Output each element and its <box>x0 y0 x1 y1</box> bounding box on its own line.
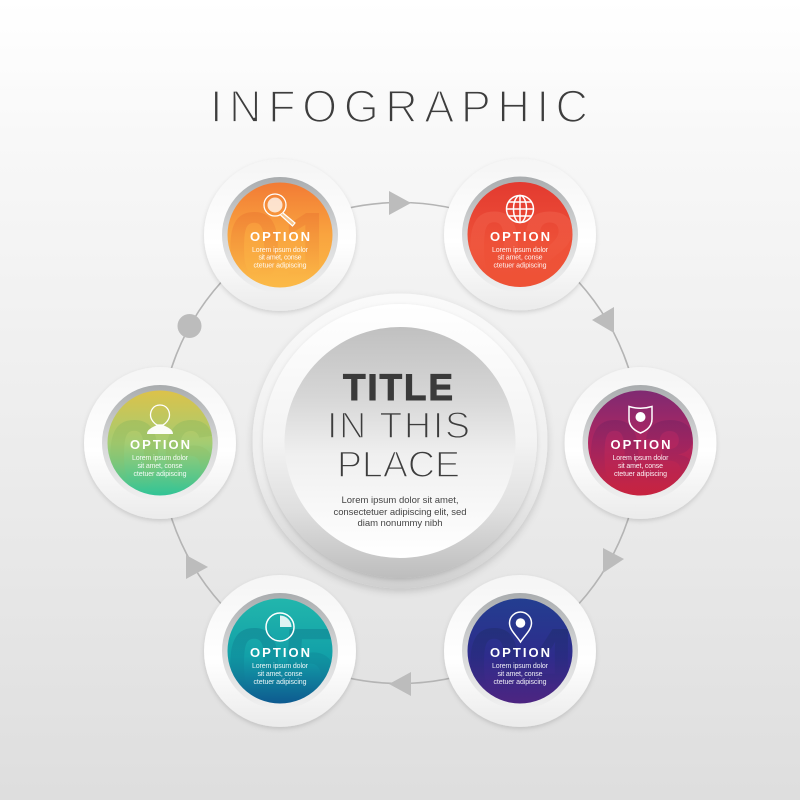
option 06: green person <box>84 367 236 519</box>
option 01 description: ctetuer adipiscing <box>254 262 307 270</box>
option 02 colour disc <box>468 182 572 287</box>
option 05 label: OPTION <box>250 645 310 660</box>
option 02: red globe <box>444 158 596 310</box>
option 05 description: Lorem ipsum dolor <box>252 663 309 670</box>
hub title: TITLE: TITLE <box>343 367 453 408</box>
option 05 description: ctetuer adipiscing <box>254 679 307 686</box>
option 01 background numeral: 01 <box>226 192 338 304</box>
option 03 label: OPTION <box>610 437 670 452</box>
option 01 label: OPTION <box>250 229 310 244</box>
option 03 description: ctetuer adipiscing <box>614 471 667 478</box>
hub outer plate <box>252 294 548 588</box>
option 06 description: Lorem ipsum dolor <box>132 455 189 462</box>
cycle connector ring <box>160 202 640 684</box>
option 03 colour disc <box>588 390 693 496</box>
option 04 white frame <box>444 575 596 727</box>
option 05 description <box>252 663 309 686</box>
option 01: orange search <box>204 159 356 311</box>
option 03 description <box>612 455 669 478</box>
option 06 grey inset ring <box>102 385 218 501</box>
option 03: magenta shield <box>564 367 716 519</box>
option 02 description <box>492 247 549 270</box>
option 01 description <box>252 247 309 270</box>
hub description: Lorem ipsum dolor sit amet, <box>342 495 458 506</box>
option 04 grey inset ring <box>462 593 578 709</box>
arrow: lower right <box>603 548 624 573</box>
central hub <box>252 294 548 588</box>
hub description: diam nonummy nibh <box>358 518 442 529</box>
arrow: upper right <box>592 307 614 333</box>
option 01 colour disc <box>228 182 332 288</box>
option 02 label: OPTION <box>490 229 550 244</box>
option 05: teal pie chart <box>204 575 356 727</box>
hub title: PLACE: PLACE <box>337 443 460 485</box>
option 01 description: Lorem ipsum dolor <box>252 247 309 254</box>
option 01 description: sit amet, conse <box>258 254 302 262</box>
option 01 white frame <box>204 159 356 311</box>
option 05 background numeral: 05 <box>226 608 338 720</box>
option 06 white frame <box>84 367 236 519</box>
hub description: consectetuer adipiscing elit, sed <box>334 507 466 518</box>
option 05 colour disc <box>228 598 332 704</box>
hub raised plate <box>263 304 537 578</box>
hub description <box>334 495 466 529</box>
icon: shield <box>629 406 652 433</box>
icon: pie chart <box>266 613 294 641</box>
option 01 grey inset ring <box>222 177 338 293</box>
option 02 description: ctetuer adipiscing <box>494 262 547 270</box>
option 02 background numeral: 02 <box>466 192 578 304</box>
option 06 background numeral: 06 <box>106 400 218 512</box>
icon: person <box>147 405 173 434</box>
option 04 background numeral: 04 <box>466 608 578 720</box>
option 06 description <box>132 455 189 478</box>
hub inner disc <box>284 327 516 558</box>
option 03 grey inset ring <box>582 385 698 501</box>
option 02 white frame <box>444 158 596 310</box>
option 04: indigo location pin <box>444 575 596 727</box>
option 03 background numeral: 03 <box>587 400 698 512</box>
option 04 colour disc <box>468 598 572 704</box>
option 02 description: sit amet, conse <box>498 254 543 262</box>
arrow: top <box>389 191 411 215</box>
option 03 description: sit amet, conse <box>618 463 663 470</box>
title: INFOGRAPHIC <box>210 81 588 132</box>
arrow: bottom <box>389 672 411 696</box>
icon: magnifier <box>264 194 295 226</box>
option 06 colour disc <box>108 390 212 496</box>
option 02 grey inset ring <box>462 176 578 292</box>
option 04 description <box>492 663 549 686</box>
cycle start dot <box>178 314 202 338</box>
option 06 description: ctetuer adipiscing <box>134 471 187 478</box>
option 06 description: sit amet, conse <box>138 463 183 470</box>
option 05 white frame <box>204 575 356 727</box>
option 04 description: ctetuer adipiscing <box>494 679 547 686</box>
option 05 grey inset ring <box>222 593 338 709</box>
option 04 description: sit amet, conse <box>498 671 543 678</box>
option 05 description: sit amet, conse <box>258 671 303 678</box>
option 06 label: OPTION <box>130 437 190 452</box>
icon: globe <box>506 196 534 222</box>
option 04 description: Lorem ipsum dolor <box>492 663 549 670</box>
option 04 label: OPTION <box>490 645 550 660</box>
option 03 white frame <box>564 367 716 519</box>
icon: location pin <box>510 612 532 642</box>
arrow: lower left <box>186 555 208 579</box>
option 02 description: Lorem ipsum dolor <box>492 247 549 254</box>
hub title: IN THIS: IN THIS <box>327 404 470 446</box>
option 03 description: Lorem ipsum dolor <box>612 455 669 462</box>
